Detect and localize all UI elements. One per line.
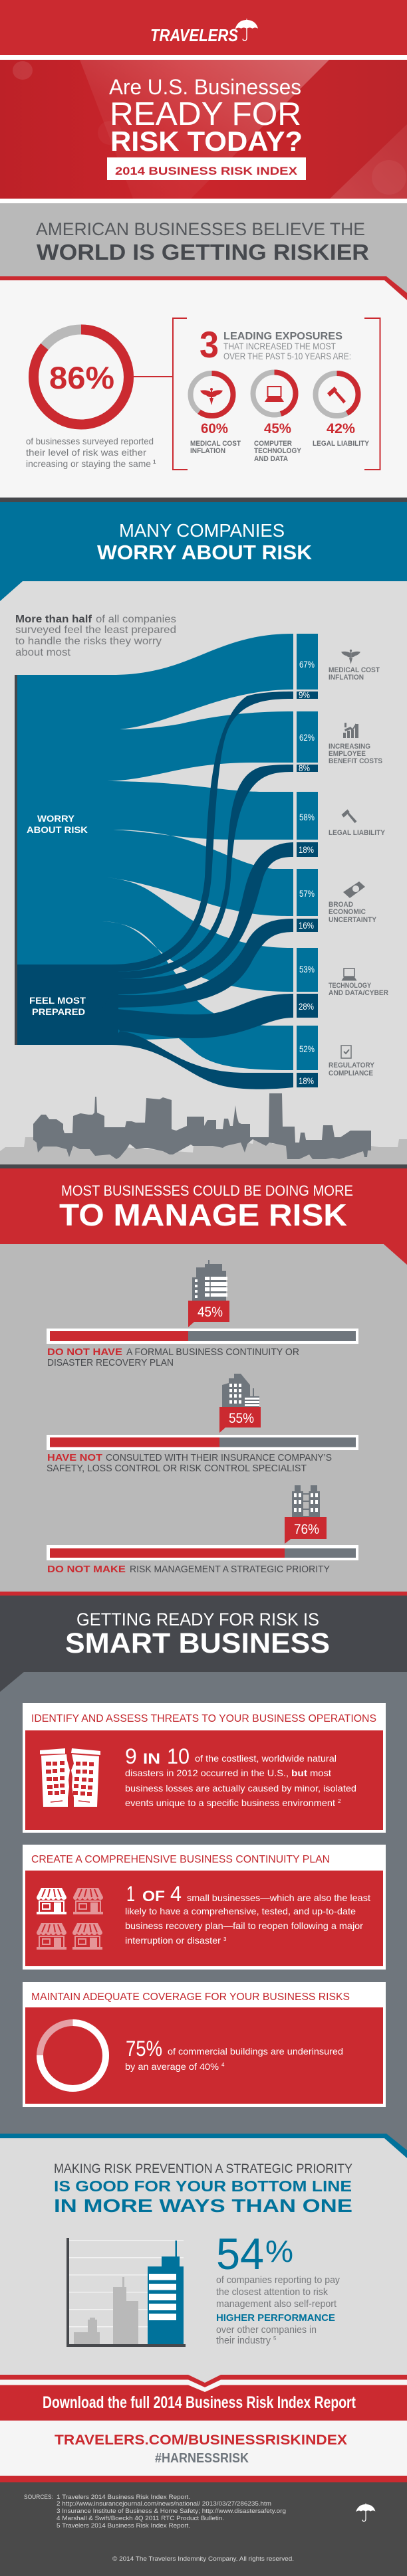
stat: 76% not a priority [47, 1485, 358, 1575]
stat text: likely to have a comprehensive, tested, and up-to-date [125, 1906, 356, 1916]
panel: identify and assess threats [23, 1703, 386, 1833]
subtitle badge: 2014 BUSINESS RISK INDEX [115, 165, 298, 177]
stat text: OF [142, 1888, 165, 1904]
panel: 86 percent ring chart: 86% [49, 360, 114, 395]
intro text: more than half: about most [15, 647, 71, 658]
icon: laptop [341, 968, 357, 980]
panel: footer sources [0, 2482, 407, 2576]
node percentages: 67% [299, 659, 315, 670]
ring chart: 75 percent [40, 2023, 106, 2088]
panel: create a continuity plan: CREATE A COMPREHENSIVE BUSINESS CONTINUITY PLAN [31, 1854, 330, 1865]
panel: identify and assess threats: IDENTIFY AND ASSESS THREATS TO YOUR BUSINESS OPERATIONS [31, 1713, 376, 1724]
panel: maintain adequate coverage: MAINTAIN ADEQUATE COVERAGE FOR YOUR BUSINESS RISKS [31, 1991, 350, 2003]
panel: 86 percent ring chart [26, 329, 156, 469]
stat text: HAVE NOT [47, 1452, 102, 1463]
label: technology and data/cyber: AND DATA/CYBER [329, 989, 388, 997]
stat text [125, 1882, 370, 1946]
icon: caduceus [341, 650, 360, 664]
flow block labels: PREPARED [32, 1006, 85, 1017]
icon: four storefronts, one highlighted [37, 1888, 103, 1950]
chart: rising buildings as bars [67, 2238, 186, 2347]
icon: umbrella [356, 2503, 375, 2522]
callout: 76% [294, 1522, 319, 1537]
panel: download banner with chevron [0, 2375, 407, 2421]
gaps between worry flows [102, 690, 293, 1026]
icon: twin towers [292, 1485, 320, 1517]
prepared flows [15, 691, 293, 1089]
title: READY FOR [110, 96, 301, 132]
stat text: 4 [221, 2062, 225, 2068]
stat text [125, 1744, 356, 1808]
ring caption: 1 [153, 459, 156, 465]
stat text: small businesses—which are also the least [187, 1892, 370, 1903]
stat text: 75% [126, 2037, 162, 2061]
heading: many companies worry about risk: WORRY ABOUT RISK [97, 541, 313, 564]
stat text: A FORMAL BUSINESS CONTINUITY OR [126, 1346, 299, 1358]
icon: gavel [342, 809, 356, 823]
ring: computer technology and data 45%: COMPUTER [254, 440, 292, 448]
ring: computer technology and data 45%: TECHNOLOGY [254, 447, 302, 455]
heading: world is getting riskier: WORLD IS GETTING RISKIER [37, 240, 369, 264]
label: regulatory compliance: COMPLIANCE [329, 1069, 373, 1077]
exposures heading: OVER THE PAST 5-10 YEARS ARE: [223, 351, 351, 361]
node percentages: 18% [299, 844, 314, 855]
stat: 55% not consulted [47, 1374, 358, 1474]
label: medical cost inflation [329, 666, 380, 682]
title [109, 75, 303, 157]
exposures heading: THAT INCREASED THE MOST [223, 341, 336, 351]
stat text: disasters in 2012 occurred in the U.S., [125, 1768, 289, 1778]
stat text: business recovery plan—fail to reopen following a major [125, 1920, 363, 1931]
callout [188, 1301, 229, 1327]
heading: to manage risk: TO MANAGE RISK [59, 1198, 347, 1232]
node percentages [299, 659, 315, 1086]
stat text [47, 1346, 299, 1368]
flow block labels: ABOUT RISK [27, 824, 88, 835]
heading: good for your bottom line: IS GOOD FOR YOUR BOTTOM LINE [54, 2177, 352, 2195]
right nodes [297, 634, 318, 1087]
intro text: more than half: More than half [15, 614, 92, 625]
stat text: 10 [167, 1744, 190, 1768]
label: medical cost inflation: MEDICAL COST [329, 666, 380, 674]
stat: 54 percent higher performance: 5 [273, 2336, 277, 2342]
heading: good for your bottom line [54, 2162, 352, 2216]
stat text: RISK MANAGEMENT A STRATEGIC PRIORITY [130, 1564, 330, 1575]
icon: cracked building [40, 1748, 100, 1807]
label: broad economic uncertainty [329, 901, 377, 924]
ring caption: their level of risk was either [26, 447, 146, 458]
panel: footer sources: 1 Travelers 2014 Business Risk Index Report. [57, 2494, 190, 2500]
stat: 54 percent higher performance: the closest attention to risk [216, 2287, 329, 2298]
label: broad economic uncertainty: UNCERTAINTY [329, 916, 377, 924]
stat text [47, 1564, 330, 1575]
stat text: DISASTER RECOVERY PLAN [47, 1357, 174, 1368]
ring: computer technology and data 45%: AND DATA [254, 455, 288, 463]
stat text: DO NOT HAVE [47, 1346, 122, 1358]
heading: to manage risk: MOST BUSINESSES COULD BE DOING MORE [61, 1182, 353, 1199]
heading: good for your bottom line: IN MORE WAYS THAN ONE [54, 2195, 352, 2216]
ring: medical cost inflation 60%: INFLATION [190, 447, 225, 455]
callout [285, 1517, 327, 1544]
category legend with icons [329, 650, 388, 1077]
callout [219, 1407, 261, 1433]
callout: 55% [229, 1411, 254, 1426]
ring: medical cost inflation 60%: 60% [201, 421, 228, 436]
ring: medical cost inflation 60% [190, 373, 241, 455]
label: technology and data/cyber: TECHNOLOGY [329, 982, 372, 990]
flow block labels: WORRY [37, 813, 75, 824]
heading: world is getting riskier: AMERICAN BUSINESSES BELIEVE THE [36, 219, 365, 239]
panel: footer sources: 3 Insurance Institute of Business & Home Safety; http://www.disastersafety.org [57, 2508, 286, 2514]
ring: medical cost inflation 60%: MEDICAL COST [190, 440, 241, 448]
node percentages: 18% [299, 1075, 314, 1086]
stat text: business losses are actually caused by minor, isolated [125, 1783, 356, 1794]
panel: footer sources: 2 http://www.insurancejournal.com/news/national/ 2013/03/27/286235.htm [57, 2500, 271, 2507]
stat text: events unique to a specific business environment [125, 1797, 335, 1808]
label: regulatory compliance [329, 1061, 375, 1077]
worry flows [15, 634, 293, 1070]
exposures heading: LEADING EXPOSURES [223, 331, 342, 342]
icon: clipboard check [341, 1046, 351, 1058]
panel: report link: TRAVELERS.COM/BUSINESSRISKINDEX [55, 2433, 347, 2448]
heading: smart business: GETTING READY FOR RISK IS [76, 1610, 319, 1629]
panel: 3 leading exposures bracket [134, 318, 380, 470]
number 3: 3 [200, 323, 219, 365]
ring: legal liability 42% [313, 373, 370, 448]
left axis strip [15, 675, 17, 1045]
progress bar [47, 1545, 358, 1560]
icon: rising chart [343, 723, 358, 738]
ring: legal liability 42%: 42% [327, 421, 355, 436]
panel: footer sources: 4 Marshall & Swift/Boeckh 4Q 2011 RTC Product Bulletin. [57, 2515, 224, 2522]
panel: maintain adequate coverage [23, 1982, 386, 2107]
progress bar [47, 1435, 358, 1450]
panel: footer sources: SOURCES: [24, 2494, 53, 2500]
stat: 54 percent higher performance: management also self-report [216, 2299, 337, 2310]
ring: computer technology and data 45% [253, 372, 302, 463]
intro text: more than half [15, 614, 176, 658]
node percentages: 9% [299, 690, 310, 700]
stat text [125, 2037, 343, 2072]
heading: smart business: SMART BUSINESS [65, 1627, 330, 1659]
logo: Travelers wordmark and umbrella: TRAVELERS [150, 25, 239, 45]
flow block labels: FEEL MOST [29, 995, 86, 1006]
label: increasing employee benefit costs: EMPLOYEE [329, 750, 366, 758]
stat text: most [310, 1768, 331, 1778]
stat text: 3 [223, 1936, 227, 1942]
node percentages: 28% [299, 1001, 314, 1012]
stat: 45% no continuity plan [47, 1260, 358, 1368]
stat: 54 percent higher performance: % [265, 2234, 293, 2268]
heading: many companies worry about risk [97, 520, 313, 564]
node percentages: 62% [299, 732, 315, 743]
panel: report link: #HARNESSRISK [155, 2451, 249, 2466]
node percentages: 57% [299, 888, 315, 899]
stat: 54 percent higher performance: HIGHER PERFORMANCE [216, 2312, 335, 2324]
stat text: IN [143, 1750, 160, 1767]
title: Are U.S. Businesses [109, 75, 301, 99]
panel: create a continuity plan [23, 1845, 386, 1970]
stat: 54 percent higher performance: of companies reporting to pay [216, 2275, 340, 2286]
icon: office tower [192, 1260, 227, 1301]
panel: footer sources: 5 Travelers 2014 Business Risk Index Report. [57, 2522, 190, 2529]
intro text: more than half: surveyed feel the least prepared [15, 624, 176, 636]
stat text: but [291, 1768, 307, 1778]
stat text: SAFETY, LOSS CONTROL OR RISK CONTROL SPECIALIST [47, 1463, 307, 1474]
label: broad economic uncertainty: BROAD [329, 901, 353, 909]
stat text: of commercial buildings are underinsured [168, 2046, 343, 2057]
stat: 54 percent higher performance: over other companies in [216, 2325, 317, 2336]
illustration: city skyline [0, 1093, 407, 1164]
heading: to manage risk [59, 1182, 353, 1232]
label: legal liability: LEGAL LIABILITY [329, 829, 386, 837]
stat text: interruption or disaster [125, 1935, 221, 1946]
stat: 54 percent higher performance: their industry [216, 2336, 271, 2346]
label: increasing employee benefit costs: BENEFIT COSTS [329, 757, 382, 765]
label: technology and data/cyber [329, 982, 388, 997]
heading: world is getting riskier [36, 219, 369, 264]
flow block labels [27, 813, 88, 1017]
stat text [47, 1452, 332, 1474]
heading: smart business [65, 1610, 330, 1659]
progress bar [47, 1329, 358, 1344]
stat text: of the costliest, worldwide natural [195, 1753, 337, 1764]
label: increasing employee benefit costs: INCREASING [329, 743, 370, 751]
label: increasing employee benefit costs [329, 743, 382, 765]
stat text: 2 [338, 1798, 341, 1804]
label: broad economic uncertainty: ECONOMIC [329, 908, 366, 916]
icon: money bill [343, 881, 365, 898]
icon: office block [222, 1374, 259, 1407]
ring caption: increasing or staying the same [26, 458, 151, 469]
stat text: 1 [126, 1882, 135, 1906]
ring caption [26, 436, 156, 469]
node percentages: 53% [299, 964, 315, 974]
panel: report link [0, 2421, 407, 2482]
subtitle badge [107, 157, 306, 180]
stat text: by an average of 40% [125, 2061, 219, 2072]
ring caption: of businesses surveyed reported [26, 436, 154, 446]
label: regulatory compliance: REGULATORY [329, 1061, 375, 1069]
node percentages: 58% [299, 812, 315, 822]
stat: 54 percent higher performance [216, 2229, 340, 2346]
chart: sankey of worry versus preparedness [15, 634, 318, 1089]
heading: many companies worry about risk: MANY COMPANIES [119, 520, 285, 541]
intro text: more than half: of all companies [96, 614, 176, 625]
ring: legal liability 42%: LEGAL LIABILITY [313, 440, 370, 448]
intro text: more than half: to handle the risks they worry [15, 636, 162, 647]
stat text: CONSULTED WITH THEIR INSURANCE COMPANY’S [106, 1452, 332, 1463]
callout: 45% [198, 1305, 223, 1320]
node percentages: 52% [299, 1044, 315, 1054]
ring: computer technology and data 45%: 45% [264, 421, 291, 436]
stat text: DO NOT MAKE [47, 1564, 126, 1575]
title: RISK TODAY? [110, 126, 303, 157]
panel: hero banner [0, 60, 407, 199]
stat text: 4 [170, 1882, 182, 1906]
stat: 54 percent higher performance: 54 [216, 2229, 264, 2279]
stat text: 9 [125, 1744, 137, 1768]
label: medical cost inflation: INFLATION [329, 674, 364, 682]
node percentages: 16% [299, 920, 314, 931]
exposures heading [223, 331, 351, 361]
heading: good for your bottom line: MAKING RISK PREVENTION A STRATEGIC PRIORITY [54, 2162, 352, 2176]
copyright: © 2014 The Travelers Indemnity Company. All rights reserved. [112, 2555, 294, 2562]
node percentages: 8% [299, 763, 310, 773]
